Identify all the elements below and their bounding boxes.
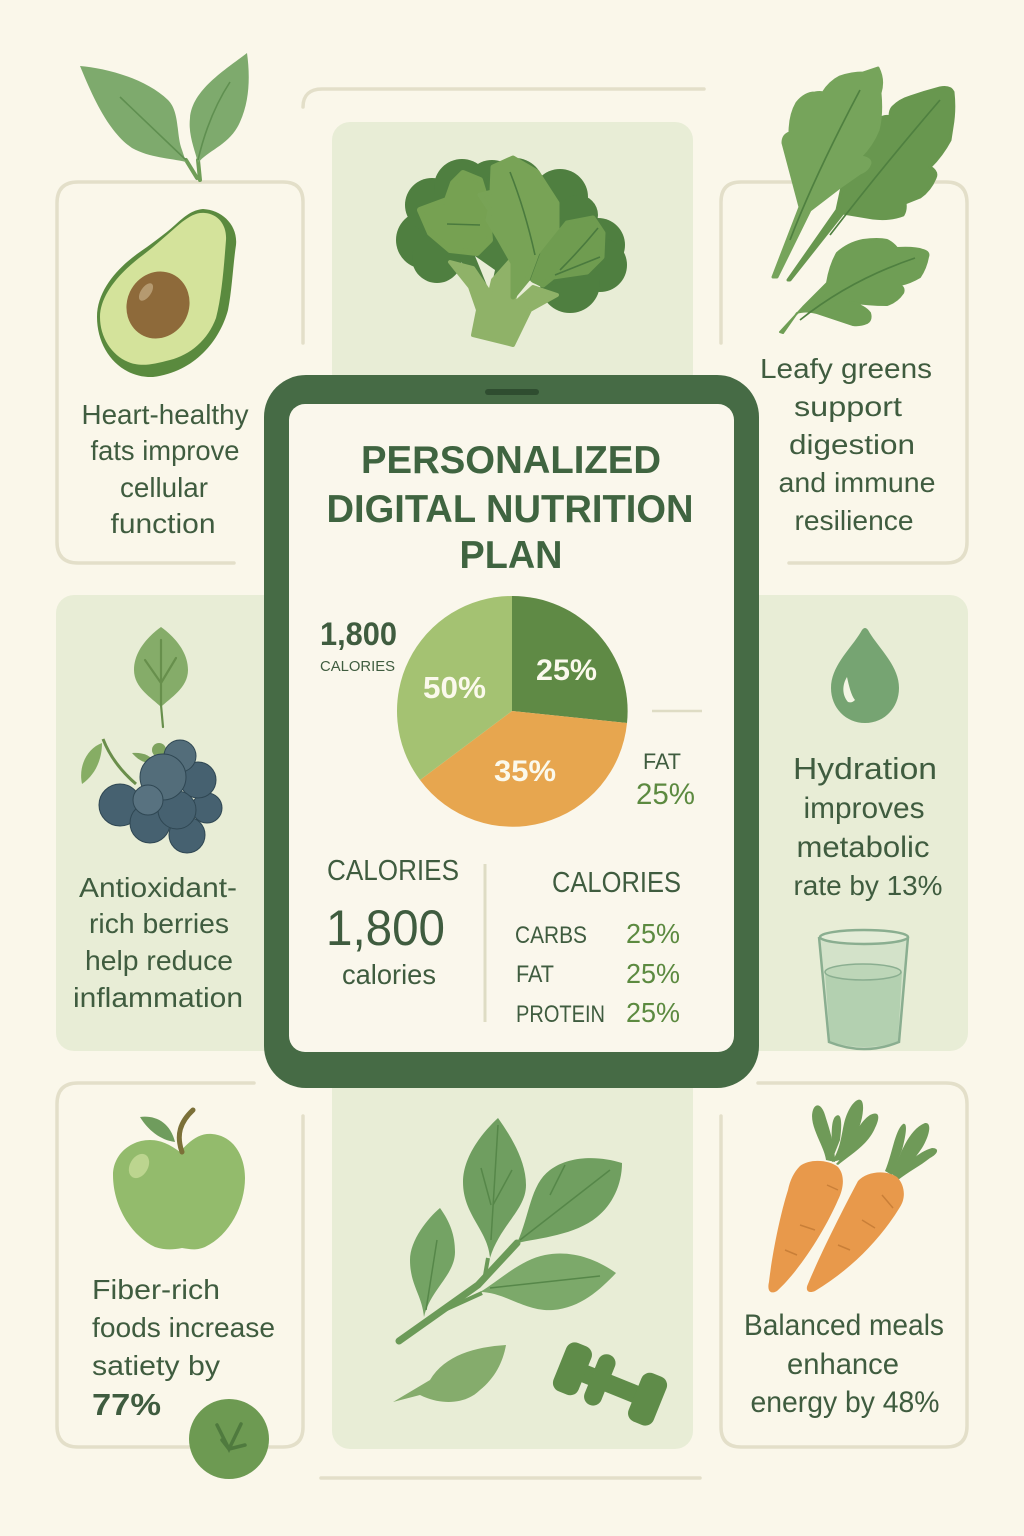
fat callout xyxy=(636,711,702,811)
text: heart-healthy fats xyxy=(82,399,248,539)
text: fiber-rich foods xyxy=(92,1274,275,1422)
calorie callout: CALORIES xyxy=(320,658,395,675)
calorie callout: 1,800 xyxy=(320,616,397,652)
icon: apple xyxy=(113,1110,245,1249)
text: fiber-rich foods: foods increase xyxy=(92,1312,275,1343)
pie chart xyxy=(397,596,628,827)
text: antioxidant berries: inflammation xyxy=(73,982,243,1013)
icon: avocado xyxy=(97,209,236,377)
text: leafy greens: support xyxy=(794,391,902,422)
icon: broccoli xyxy=(396,158,627,345)
text: leafy greens xyxy=(760,353,936,536)
text: fiber-rich foods: Fiber-rich xyxy=(92,1274,220,1305)
macro table: CARBS xyxy=(515,922,587,949)
title: PERSONALIZED xyxy=(361,439,661,482)
icon: leafy branch xyxy=(393,1118,622,1402)
text: heart-healthy fats: cellular xyxy=(120,472,208,503)
icon: water drop xyxy=(831,628,899,723)
icon: carrots xyxy=(768,1100,937,1292)
text: fiber-rich foods: satiety by xyxy=(92,1350,220,1381)
panel: leaf and dumbbell backdrop xyxy=(332,1070,693,1449)
macro table: FAT xyxy=(516,961,554,988)
macro table: PROTEIN xyxy=(516,1001,605,1028)
macro table: CALORIES xyxy=(552,867,681,899)
card: heart-healthy fats xyxy=(82,209,248,539)
text: balanced meals: energy by 48% xyxy=(750,1386,940,1419)
calories summary xyxy=(326,855,459,990)
icon: spinach leaves xyxy=(773,68,954,333)
text: fiber-rich foods: 77% xyxy=(92,1387,161,1422)
panel: broccoli backdrop xyxy=(332,122,693,392)
icon: tablet notch xyxy=(485,389,539,395)
macro table xyxy=(515,867,681,1028)
text: balanced meals: enhance xyxy=(787,1348,899,1381)
fat callout: 25% xyxy=(636,778,695,811)
panel: hydration backdrop xyxy=(740,595,968,1051)
panel: tablet xyxy=(264,375,759,1088)
text: leafy greens: Leafy greens xyxy=(760,353,932,384)
title xyxy=(326,439,694,577)
text: heart-healthy fats: function xyxy=(110,508,216,539)
icon: small leaf and blueberries xyxy=(81,627,222,853)
text: leafy greens: and immune xyxy=(778,467,936,498)
calories summary: CALORIES xyxy=(327,855,459,887)
icon: dumbbell xyxy=(550,1339,670,1429)
icon: top-left leaves xyxy=(80,53,249,180)
text: leafy greens: digestion xyxy=(789,429,915,460)
calories summary: calories xyxy=(342,959,436,990)
text: balanced meals: Balanced meals xyxy=(744,1309,944,1342)
macro table: 25% xyxy=(626,918,680,949)
title: DIGITAL NUTRITION xyxy=(326,488,694,531)
text: hydration: improves xyxy=(804,792,924,825)
text: heart-healthy fats: fats improve xyxy=(90,435,240,466)
calories summary: 1,800 xyxy=(326,900,445,956)
text: balanced meals xyxy=(744,1309,944,1419)
text: antioxidant berries: Antioxidant- xyxy=(79,872,237,903)
calorie callout xyxy=(320,616,397,675)
text: hydration: metabolic xyxy=(796,831,930,864)
pie chart: 50% xyxy=(423,670,486,705)
text: leafy greens: resilience xyxy=(794,505,914,536)
title: PLAN xyxy=(460,534,562,577)
pie chart: 35% xyxy=(494,755,556,788)
text: hydration xyxy=(793,751,942,901)
pie chart: 25% xyxy=(536,654,597,687)
text: hydration: Hydration xyxy=(793,751,937,786)
panel: antioxidant backdrop xyxy=(56,595,286,1051)
text: heart-healthy fats: Heart-healthy xyxy=(82,399,248,430)
text: hydration: rate by 13% xyxy=(794,870,942,901)
macro table: 25% xyxy=(626,958,680,989)
fat callout: FAT xyxy=(643,749,681,774)
text: antioxidant berries: help reduce xyxy=(85,945,233,976)
text: antioxidant berries: rich berries xyxy=(89,908,229,939)
text: antioxidant berries xyxy=(73,872,243,1013)
icon: water glass xyxy=(819,930,908,1049)
icon: check badge xyxy=(189,1399,269,1479)
macro table: 25% xyxy=(626,997,680,1028)
